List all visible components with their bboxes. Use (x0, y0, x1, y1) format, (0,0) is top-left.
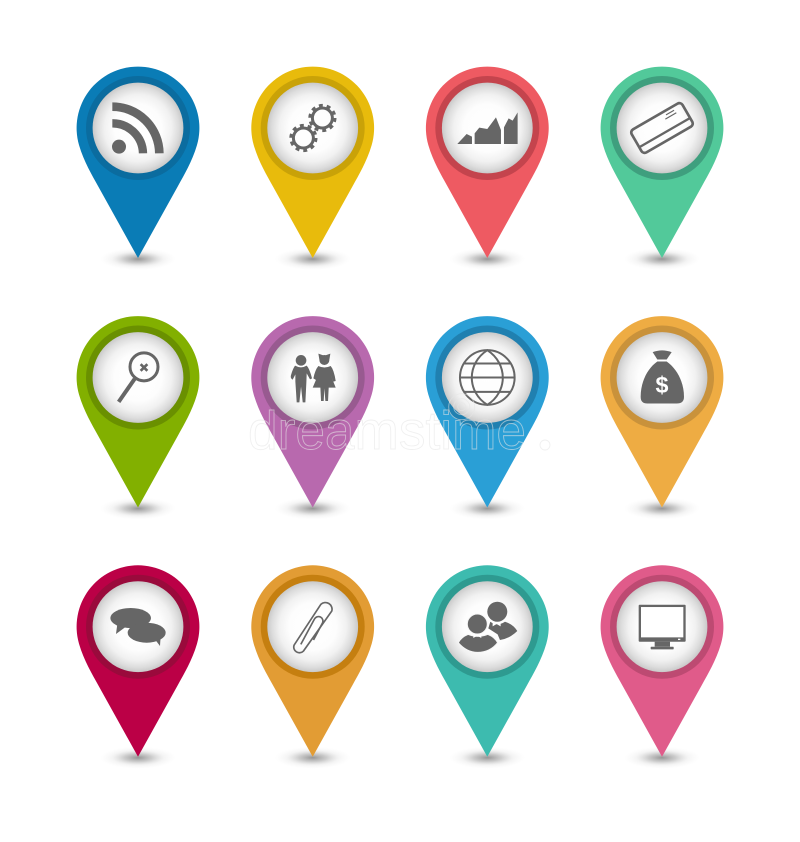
face (442, 581, 533, 672)
pin: gears (251, 67, 374, 270)
watermark: dreamstime (248, 401, 526, 461)
pin: chat (77, 565, 199, 769)
ring (610, 76, 714, 180)
face (442, 83, 533, 173)
icon: magnifier (119, 353, 158, 402)
pin: people (251, 316, 374, 520)
pin: rss (77, 67, 199, 270)
shadow (624, 498, 700, 520)
ring (435, 76, 539, 180)
icon: rss (112, 107, 159, 154)
pin body (601, 67, 723, 258)
pin: credit card (601, 67, 723, 270)
pin: money bag (601, 316, 723, 520)
ring (261, 76, 365, 180)
icon: area chart (457, 112, 518, 144)
shadow (275, 747, 351, 769)
face (442, 332, 533, 423)
pin body (426, 67, 549, 258)
pin: chart (426, 67, 549, 270)
face (93, 581, 183, 672)
pin body (426, 565, 549, 757)
icon: couple (291, 354, 336, 402)
face (267, 332, 358, 423)
icon: money bag (641, 350, 684, 403)
face (93, 83, 183, 173)
shadow (100, 498, 176, 520)
icon: users (458, 602, 517, 652)
shadow (449, 248, 525, 270)
face (93, 332, 183, 423)
face (267, 581, 358, 672)
pin body (426, 316, 549, 508)
shadow (100, 248, 176, 270)
ring (86, 326, 190, 430)
shadow (275, 248, 351, 270)
pin: paperclip (251, 565, 374, 769)
icon: globe (460, 350, 515, 405)
pin body (601, 565, 723, 757)
face (267, 83, 358, 173)
shadow (100, 747, 176, 769)
pin body (601, 316, 723, 508)
pin: users (426, 565, 549, 769)
ring (261, 326, 365, 430)
pin body (251, 316, 374, 508)
face (617, 83, 707, 173)
pin: magnifier (77, 316, 199, 520)
shadow (624, 747, 700, 769)
ring (610, 575, 714, 679)
ring (86, 575, 190, 679)
pin body (77, 565, 199, 757)
icon: credit card (630, 102, 694, 154)
shadow (275, 498, 351, 520)
pin: monitor (601, 565, 723, 769)
face (617, 332, 707, 423)
shadow (449, 747, 525, 769)
icon: money bag: $ (656, 372, 669, 398)
pin: globe (426, 316, 549, 520)
face (617, 581, 707, 672)
ring (86, 76, 190, 180)
shadow (449, 498, 525, 520)
icon: monitor (639, 605, 686, 649)
ring (261, 575, 365, 679)
pin body (77, 316, 199, 508)
icon: gears (291, 105, 335, 151)
ring (435, 575, 539, 679)
pin body (77, 67, 199, 258)
ring (435, 326, 539, 430)
icon: paperclip (294, 603, 332, 653)
icon: chat bubbles (110, 608, 166, 646)
pin body (251, 67, 374, 258)
shadow (624, 248, 700, 270)
pin body (251, 565, 374, 757)
ring (610, 326, 714, 430)
